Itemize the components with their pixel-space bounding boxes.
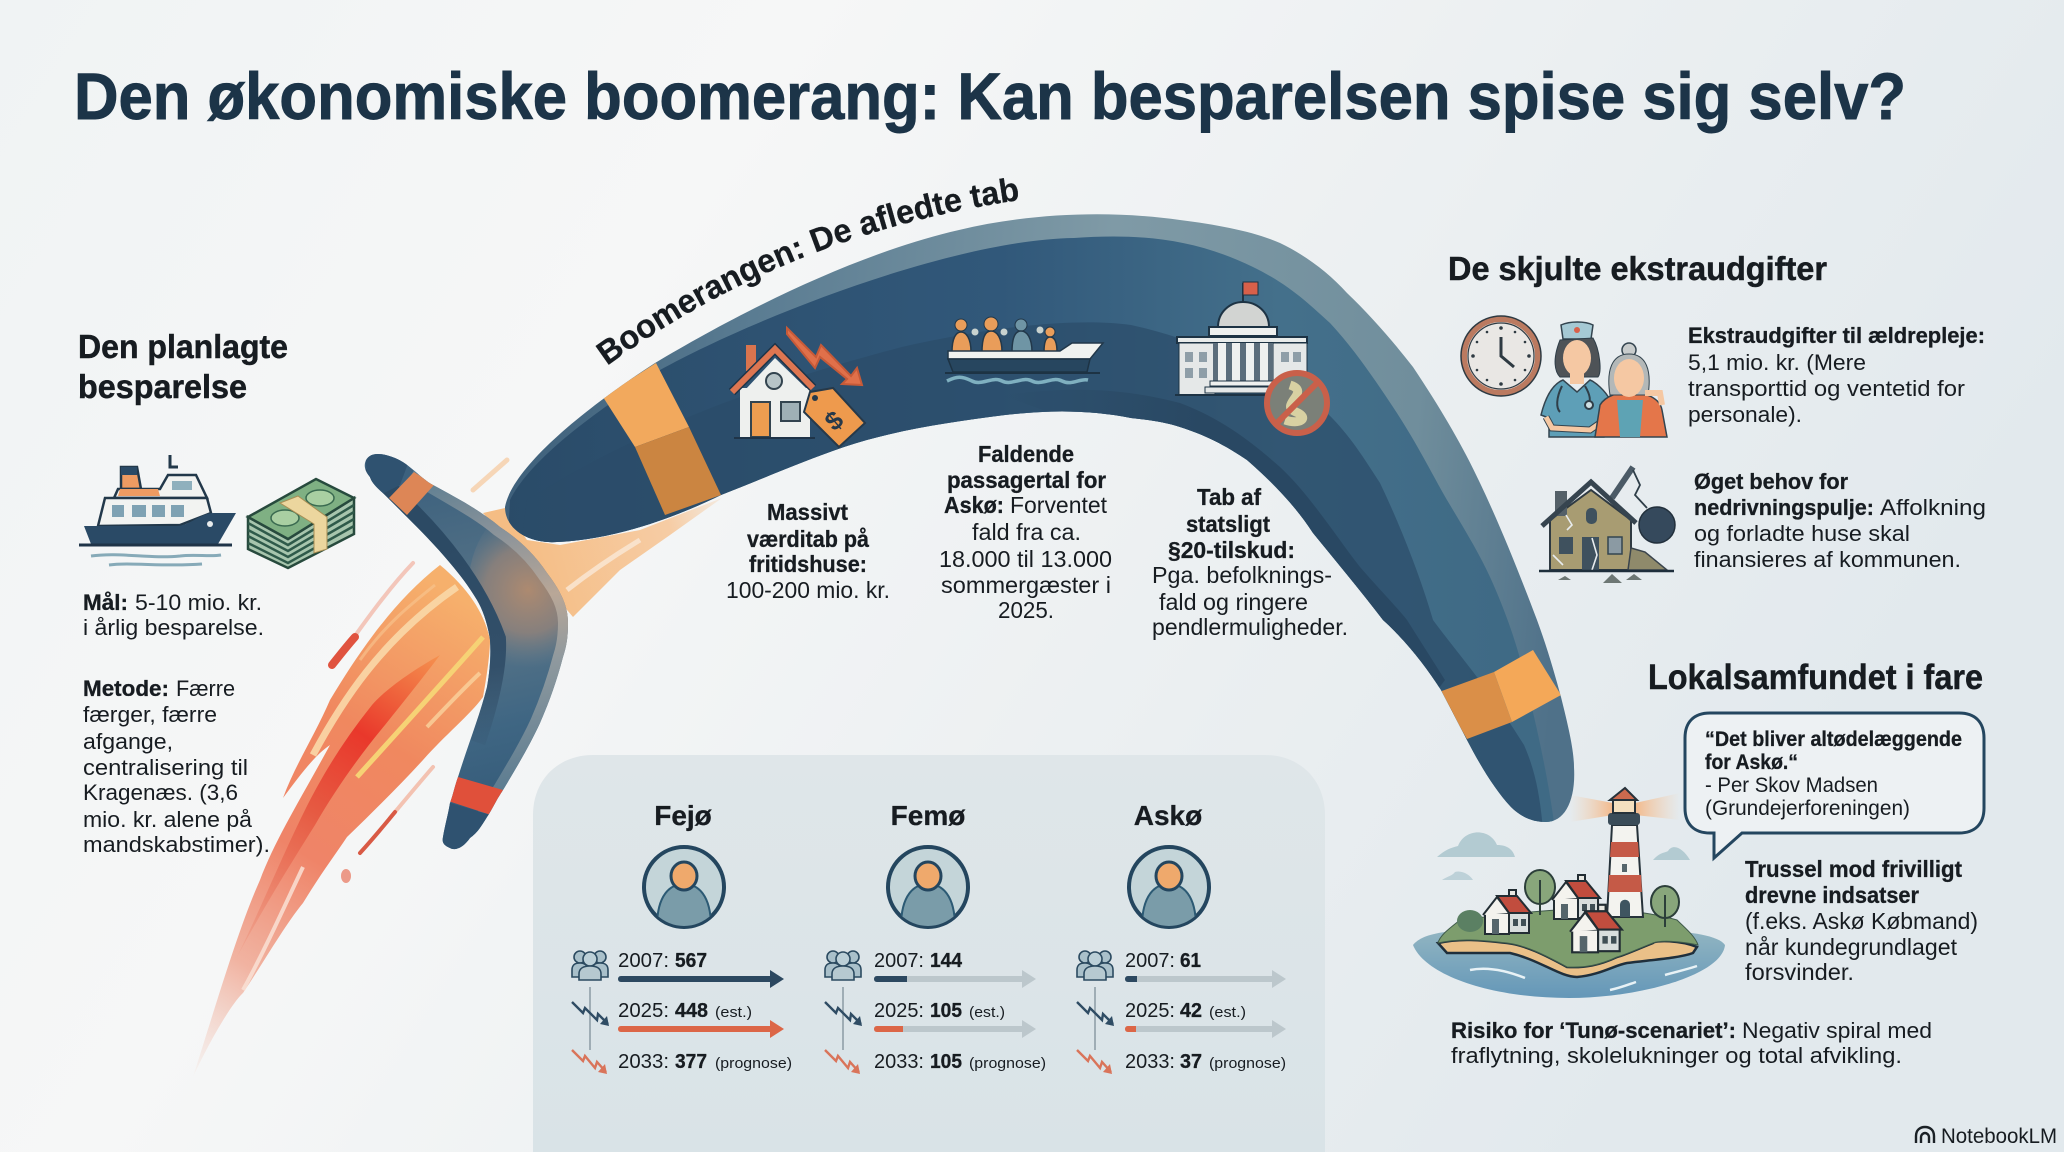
text: volunteer threat: Trussel mod frivilligt [1745, 856, 1962, 882]
icon: house value loss [732, 328, 865, 447]
caption: state grant: pendlermuligheder. [1152, 614, 1348, 640]
column: Askø: (prognose) [1209, 1055, 1286, 1072]
text: elder care costs: Ekstraudgifter til ældrepleje: [1688, 323, 1985, 348]
heading: hidden costs: De skjulte ekstraudgifter [1448, 250, 1827, 287]
text: method: centralisering til [83, 755, 248, 780]
caption: passengers: sommergæster i [941, 572, 1111, 598]
icon: stack of money [248, 479, 354, 568]
speech bubble [1685, 713, 1984, 858]
caption: holiday homes: 100-200 mio. kr. [726, 577, 890, 603]
column: Femø: 2007: [874, 950, 924, 972]
text: volunteer threat: forsvinder. [1745, 959, 1854, 985]
text: volunteer threat [1745, 856, 1978, 985]
caption: state grant: Pga. befolknings- [1152, 562, 1332, 588]
text: elder care costs: personale). [1688, 402, 1802, 427]
NotebookLM logo: NotebookLM [1941, 1125, 2057, 1148]
column: Fejø: 2025: [618, 1000, 669, 1022]
heading: planned saving: besparelse [78, 368, 247, 405]
text: demolition pool: Øget behov for [1694, 469, 1848, 494]
text: method [83, 676, 270, 857]
text: method: mio. kr. alene på [83, 807, 253, 832]
column: Femø [825, 800, 1046, 1074]
speech bubble: (Grundejerforeningen) [1705, 797, 1910, 820]
caption: passengers [939, 441, 1112, 623]
column: Askø: 37 [1180, 1051, 1202, 1073]
text: demolition pool: finansieres af kommunen. [1694, 547, 1961, 572]
icon: ferry [79, 455, 236, 565]
icon: house value loss: $ [819, 404, 849, 437]
column: Femø: 2025: [874, 1000, 924, 1022]
column: Askø: 2033: [1125, 1051, 1175, 1073]
caption: passengers: Faldende [978, 441, 1074, 467]
column: Askø: 2025: [1125, 1000, 1175, 1022]
column: Fejø: 2007: [618, 950, 669, 972]
orange band left [603, 363, 721, 515]
column: Fejø: 377 [675, 1051, 707, 1073]
column: Askø: Askø [1134, 800, 1202, 831]
text: volunteer threat: (f.eks. Askø Købmand) [1745, 908, 1978, 934]
column: Askø: (est.) [1209, 1004, 1246, 1021]
text: demolition pool [1694, 469, 1986, 572]
small boomerang arm (thrown) [364, 454, 568, 850]
text: method: mandskabstimer). [83, 832, 270, 857]
icon: nurse and elderly person [1541, 322, 1667, 437]
text: method: Kragenæs. (3,6 [83, 780, 238, 805]
text: elder care costs: transporttid og ventetid for [1688, 376, 1965, 401]
caption: passengers: Askø: [944, 492, 1004, 518]
speech bubble: - Per Skov Madsen [1705, 774, 1878, 797]
curved label: De afledte tab [607, 200, 1020, 366]
caption: state grant: Tab af [1197, 484, 1261, 510]
column: Fejø: 448 [675, 1000, 708, 1022]
column: Femø: 144 [930, 950, 963, 972]
caption: state grant: statsligt [1186, 511, 1270, 537]
heading: planned saving [78, 328, 288, 405]
caption: holiday homes: Massivt [767, 499, 848, 525]
caption: state grant: §20-tilskud: [1168, 537, 1295, 563]
text: Tunø scenario: Risiko for ‘Tunø-scenariet’: [1451, 1018, 1736, 1043]
text: goal: Mål: [83, 590, 128, 615]
speech bubble: “Det bliver altødelæggende [1705, 728, 1962, 751]
text: Tunø scenario: fraflytning, skolelukninger og total afvikling. [1451, 1043, 1902, 1068]
column: Femø: 105 [930, 1000, 962, 1022]
heading: community at risk: Lokalsamfundet i fare [1648, 658, 1983, 697]
icon: demolished house and wrecking ball [1539, 467, 1675, 583]
motion flames behind the boomerang [193, 460, 722, 1077]
icon: clock [1461, 316, 1541, 396]
text: demolition pool: og forladte huse skal [1694, 521, 1910, 546]
caption: passengers: Forventet [1010, 492, 1108, 518]
caption: holiday homes [726, 499, 890, 603]
column: Askø [1077, 800, 1286, 1074]
column: Fejø: Fejø [654, 800, 712, 831]
column: Femø: Femø [891, 800, 965, 831]
text: method: afgange, [83, 729, 173, 754]
caption: passengers: fald fra ca. [972, 519, 1081, 545]
column: Fejø [572, 800, 792, 1074]
orange band right [1439, 650, 1561, 739]
text: Tunø scenario [1451, 1018, 1932, 1068]
text: goal: 5-10 mio. kr. [135, 590, 262, 615]
caption: passengers: 2025. [998, 597, 1054, 623]
column: Fejø: (est.) [715, 1004, 752, 1021]
icon: government building and no-money sign [1175, 282, 1327, 433]
text: demolition pool: nedrivningspulje: [1694, 495, 1874, 520]
text: volunteer threat: når kundegrundlaget [1745, 934, 1958, 960]
column: Femø: 2033: [874, 1051, 924, 1073]
icon: ferry with passengers [945, 317, 1103, 383]
text: Tunø scenario: Negativ spiral med [1742, 1018, 1932, 1043]
text: method: Færre [176, 676, 235, 701]
icon: island with lighthouse [1413, 788, 1725, 998]
column: Askø: 2007: [1125, 950, 1175, 972]
text: method: færger, færre [83, 702, 217, 727]
text: volunteer threat: drevne indsatser [1745, 882, 1919, 908]
text: Boomerangen: De afledte tab [596, 178, 1018, 365]
speech bubble: for Askø.“ [1705, 751, 1798, 774]
text: goal [83, 590, 264, 640]
caption: state grant: fald og ringere [1159, 589, 1308, 615]
text: elder care costs [1688, 323, 1985, 427]
column: Fejø: 2033: [618, 1051, 669, 1073]
column: Femø: (prognose) [969, 1055, 1046, 1072]
title: Den økonomiske boomerang: Kan besparelsen spise sig selv? [74, 59, 1906, 133]
caption: holiday homes: fritidshuse: [749, 551, 867, 577]
text: demolition pool: Affolkning [1880, 495, 1986, 520]
caption: state grant [1152, 484, 1348, 640]
column: Femø: (est.) [969, 1004, 1005, 1021]
column: Askø: 42 [1180, 1000, 1202, 1022]
text: goal: i årlig besparelse. [83, 615, 264, 640]
panel: islands population [533, 755, 1325, 1152]
caption: passengers: passagertal for [947, 467, 1106, 493]
text: method: Metode: [83, 676, 169, 701]
column: Fejø: 567 [675, 950, 707, 972]
caption: passengers: 18.000 til 13.000 [939, 546, 1112, 572]
large boomerang body [505, 214, 1574, 822]
heading: planned saving: Den planlagte [78, 328, 288, 365]
text: elder care costs: 5,1 mio. kr. (Mere [1688, 350, 1866, 375]
caption: holiday homes: værditab på [747, 526, 869, 552]
column: Askø: 61 [1180, 950, 1201, 972]
column: Femø: 105 [930, 1051, 962, 1073]
column: Fejø: (prognose) [715, 1055, 792, 1072]
